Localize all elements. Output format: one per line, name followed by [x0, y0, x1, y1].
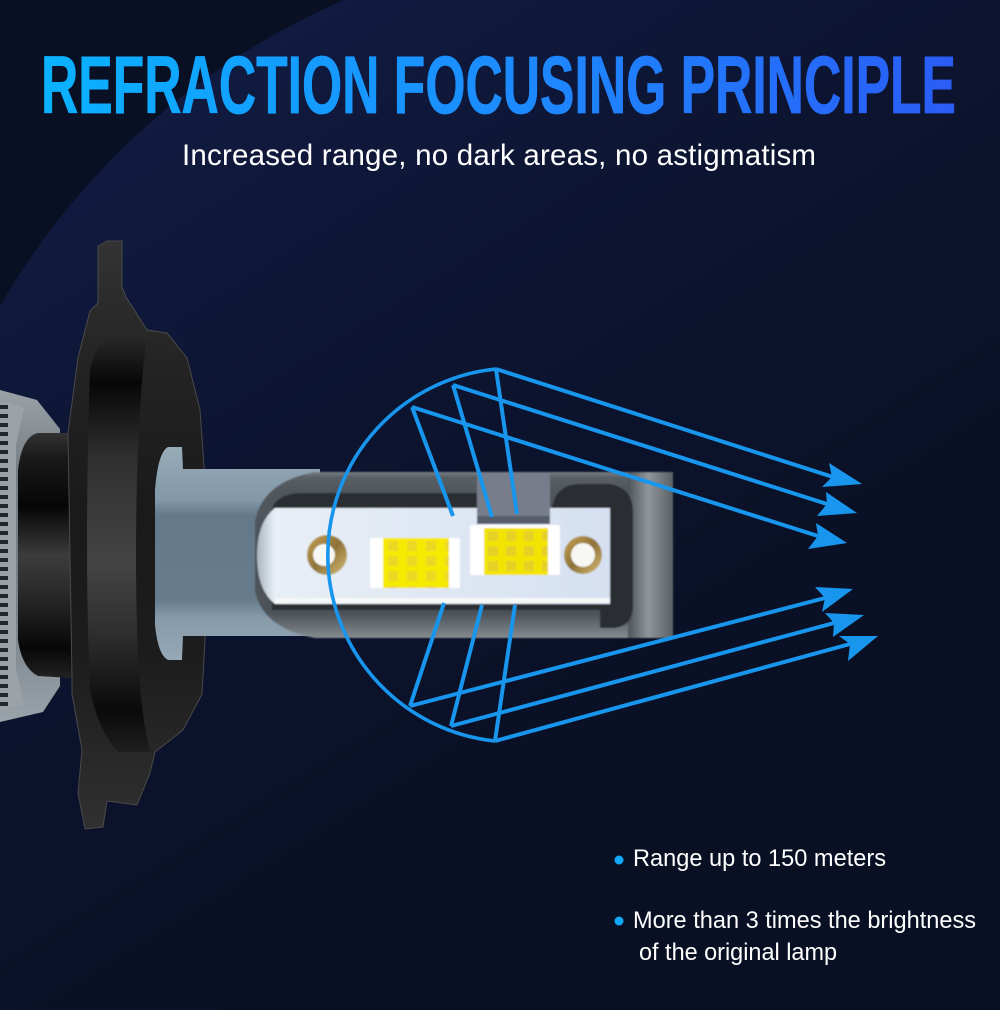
bullet two	[614, 907, 976, 966]
outgoing rays	[410, 369, 850, 741]
upper dark slot	[272, 493, 477, 508]
circuit board	[257, 508, 610, 604]
inner rays bottom	[410, 603, 515, 741]
reflector arc	[328, 369, 496, 741]
bullet two: of the original lamp	[639, 939, 837, 966]
LED chip right	[470, 525, 560, 575]
mounting flange	[68, 241, 205, 829]
subtitle: Increased range, no dark areas, no astigmatism	[182, 139, 816, 172]
metal tube	[155, 447, 320, 660]
LED housing	[255, 472, 673, 638]
center tab over board	[477, 472, 550, 523]
LED bulb illustration	[0, 241, 673, 829]
bullet one: Range up to 150 meters	[633, 845, 886, 872]
feature list	[614, 845, 976, 966]
flange raised band	[87, 333, 150, 752]
refraction light rays	[328, 369, 878, 741]
right dark bracket	[272, 484, 633, 628]
LED chip left	[370, 538, 460, 588]
bullet two: More than 3 times the brightness	[633, 907, 976, 934]
neck	[18, 433, 72, 678]
mounting screw left	[307, 535, 347, 575]
LED module	[255, 472, 673, 638]
heat sink fins	[0, 390, 60, 722]
arrowheads	[808, 463, 878, 661]
mounting screw right	[564, 536, 602, 574]
inner rays top	[412, 369, 517, 517]
